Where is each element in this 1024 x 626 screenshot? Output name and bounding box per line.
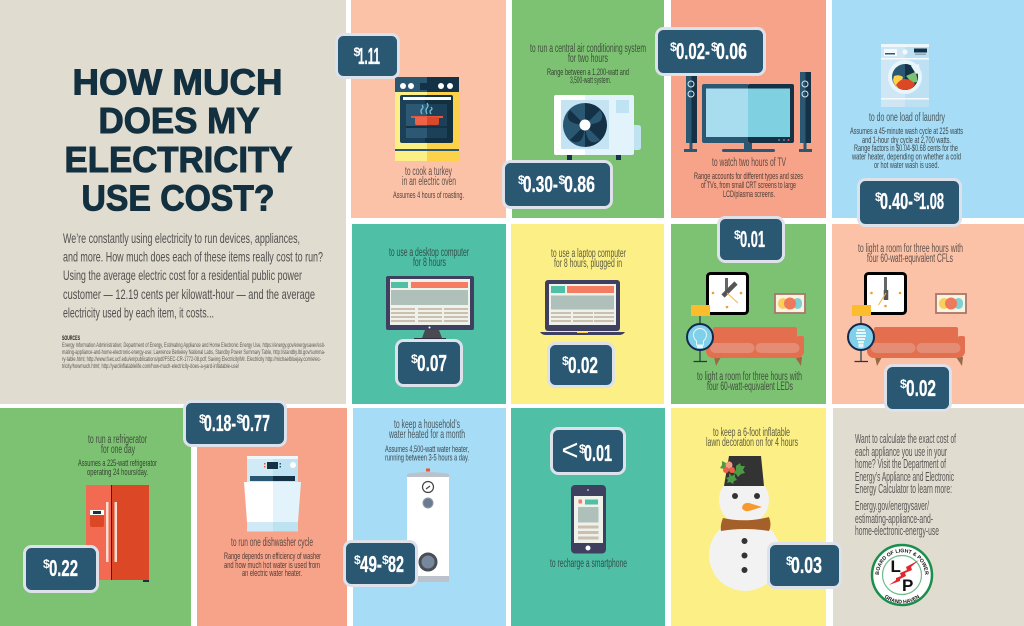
caption: refrigerator: for one day	[101, 444, 135, 456]
caption: laundry: to do one load of laundry	[869, 112, 945, 124]
panel: laptop computer	[511, 224, 664, 404]
price badge: refrigerator $0.22: 0.22	[49, 555, 78, 581]
caption: water heater: running between 3-5 hours a day.	[385, 452, 469, 464]
intro paragraph: customer — 12.19 cents per kilowatt-hour — and the average	[63, 286, 315, 302]
price badge: television $0.02-$0.06	[656, 28, 764, 74]
price badge: snowman $0.03	[768, 544, 840, 588]
price badge: smartphone less than $0.01	[552, 428, 624, 474]
logo: Board of Light and Power: GRAND HAVEN	[885, 594, 920, 604]
price badge: air conditioning $0.30-$0.86: $	[558, 173, 566, 187]
price badge: television $0.02-$0.06: $	[711, 40, 718, 54]
caption: television: to watch two hours of TV	[712, 157, 786, 169]
caption: air conditioning: for two hours	[568, 53, 608, 65]
panel: CFL lighting	[832, 224, 1024, 404]
price badge: air conditioning $0.30-$0.86: $	[518, 173, 525, 187]
price badge: oven $1.11: 1.11	[358, 43, 380, 69]
caption: dishwasher: Range depends on efficiency of washer	[224, 551, 321, 562]
icon: snowman	[709, 456, 781, 591]
price badge: desktop $0.07: $	[411, 352, 418, 366]
caption: LEDs	[697, 371, 802, 393]
caption: CFLs	[858, 243, 963, 265]
price badge: refrigerator $0.22	[24, 546, 98, 592]
text: calculator invitation: each appliance you use in your	[855, 445, 947, 459]
text: calculator invitation	[855, 432, 956, 496]
text: web address	[855, 499, 939, 538]
title: DOES MY	[98, 100, 260, 141]
price badge: television $0.02-$0.06: $	[670, 40, 677, 54]
price badge: dishwasher $0.18-$0.77	[184, 402, 286, 446]
price badge: air conditioning $0.30-$0.86: 0.30-	[523, 171, 558, 197]
icon: water heater	[407, 468, 449, 582]
panel: inflatable snowman	[671, 408, 826, 626]
caption: laundry: and 1-hour dry cycle at 2,700 watts.	[862, 135, 951, 146]
price badge: CFL lighting $0.02: $	[900, 377, 907, 391]
icon: sofa	[867, 327, 965, 366]
icon: dishwasher	[244, 456, 301, 532]
panel: laundry	[832, 0, 1024, 218]
title: HOW MUCH	[72, 62, 282, 102]
caption: turkey	[393, 166, 464, 201]
sources: Energy Information Administration; Department of Energy, Estimating Appliance and Home Electronic Energy Use, https://energy.gov/energysaver/esti-	[62, 342, 325, 349]
caption: turkey: to cook a turkey	[405, 166, 452, 178]
caption: desktop: to use a desktop computer	[389, 247, 469, 259]
caption: water heater: to keep a household’s	[394, 419, 460, 431]
price badge: CFL lighting $0.02: 0.02	[906, 375, 936, 401]
price badge: desktop $0.07: 0.07	[417, 350, 447, 376]
price badge: water heater $49-$82: 49-	[360, 551, 382, 577]
caption: dishwasher: to run one dishwasher cycle	[231, 537, 313, 549]
price badge: laptop $0.02: 0.02	[568, 352, 598, 378]
icon: smartphone	[571, 485, 606, 554]
caption: television	[694, 157, 803, 200]
price badge: water heater $49-$82: $	[382, 553, 389, 567]
intro paragraph: and more. How much does each of these items really cost to run?	[63, 248, 323, 264]
price badge: oven $1.11	[336, 34, 398, 78]
price badge: oven $1.11: $	[354, 45, 360, 59]
price badge: laundry $0.40-$1.08	[858, 180, 960, 226]
icon: washing machine	[881, 44, 929, 107]
panel: oven	[351, 0, 506, 218]
caption: television: LCD/plasma screens.	[723, 189, 775, 200]
intro paragraph: Using the average electric cost for a residential public power	[63, 267, 302, 283]
logo: Board of Light and Power: BOARD OF LIGHT & POWER	[875, 548, 928, 575]
panel: LED lighting	[671, 224, 826, 404]
caption: snowman: lawn decoration on for 4 hours	[706, 437, 798, 449]
sources: ry-table.html; http://www.fsec.ucf.edu/en/publications/pdf/FSEC-CR-1772-08.pdf; Saving Electricity/Mr. Electricity http://michaelbluejay.com/elec-	[62, 356, 321, 363]
price badge: television $0.02-$0.06: 0.06	[716, 38, 747, 64]
icon: laptop	[540, 280, 625, 335]
price badge: LED lighting $0.01: 0.01	[740, 226, 765, 252]
price badge: water heater $49-$82: $	[354, 553, 361, 567]
caption: refrigerator: to run a refrigerator	[88, 434, 147, 446]
caption: laundry	[850, 112, 963, 171]
price badge: smartphone less than $0.01: 0.01	[584, 440, 612, 466]
logo: Board of Light and Power	[870, 544, 934, 606]
caption: television: Range accounts for different types and sizes	[694, 171, 803, 182]
caption: smartphone: to recharge a smartphone	[550, 558, 627, 570]
price badge: snowman $0.03: $	[786, 554, 793, 568]
text: web address: home-electronic-energy-use	[855, 524, 939, 538]
panel: television	[671, 0, 826, 218]
sources	[62, 335, 325, 370]
text: web address: Energy.gov/energysaver/	[855, 499, 929, 513]
caption: CFLs: four 60-watt-equivalent CFLs	[867, 253, 953, 265]
sources: mating-appliance-and-home-electronic-energy-use; Lawrence Berkeley National Labs, Standby Power Summary Table, http://standby.lbl.gov/summa-	[62, 349, 325, 356]
icon: wall picture	[775, 294, 805, 313]
price badge: laundry $0.40-$1.08: 1.08	[919, 188, 944, 214]
price badge: television $0.02-$0.06: 0.02-	[676, 38, 710, 64]
icon: lamp with LED bulb	[687, 305, 713, 362]
price badge: air conditioning $0.30-$0.86: 0.86	[564, 171, 595, 197]
icon: clock	[708, 274, 748, 314]
price badge: LED lighting $0.01	[718, 218, 784, 262]
panel: water heater	[353, 408, 506, 626]
price badge: dishwasher $0.18-$0.77: $	[199, 412, 206, 426]
caption: snowman	[706, 427, 798, 449]
icon: television and speakers	[684, 72, 812, 152]
price badge: laundry $0.40-$1.08: $	[875, 190, 882, 204]
caption: water heater: Assumes 4,500-watt water heater,	[385, 444, 469, 455]
caption: dishwasher: an electric water heater.	[242, 568, 302, 579]
caption: refrigerator: Assumes a 225-watt refrigerator	[78, 458, 157, 469]
price badge: dishwasher $0.18-$0.77: 0.77	[242, 410, 270, 436]
panel: desktop computer	[352, 224, 506, 404]
price badge: smartphone less than $0.01: $	[579, 442, 586, 456]
title	[64, 62, 292, 218]
icon: clock	[866, 274, 906, 314]
price badge: dishwasher $0.18-$0.77: $	[236, 412, 244, 426]
panel: dishwasher	[197, 408, 347, 626]
caption: air conditioning: 3,500-watt system.	[570, 75, 611, 86]
text: web address: estimating-appliance-and-	[855, 512, 933, 526]
caption: refrigerator	[78, 434, 157, 478]
panel: refrigerator	[0, 408, 191, 626]
caption: turkey: in an electric oven	[402, 176, 456, 188]
caption: LEDs: to light a room for three hours with	[697, 371, 802, 383]
intro paragraph: electricity used by each item, it costs...	[63, 304, 214, 320]
caption: snowman: to keep a 6-foot inflatable	[713, 427, 790, 439]
caption: turkey: Assumes 4 hours of roasting.	[393, 190, 464, 201]
price badge: snowman $0.03: 0.03	[791, 552, 822, 578]
sources: tricity/howmuch.html; http://yardinflatablelife.com/how-much-electricity-does-a-yard-inflatable-use/	[62, 363, 239, 370]
caption: television: of TVs, from small CRT screens to large	[701, 180, 796, 191]
caption: air conditioning	[530, 43, 646, 86]
price badge: laundry $0.40-$1.08: 0.40-	[880, 188, 913, 214]
price badge: desktop $0.07	[396, 340, 462, 386]
title: USE COST?	[82, 178, 274, 218]
sources: SOURCES	[62, 335, 80, 342]
icon: wall picture	[936, 294, 966, 313]
caption: laptop	[551, 248, 626, 270]
price badge: water heater $49-$82	[344, 542, 416, 586]
icon: air conditioner	[554, 95, 641, 160]
price badge: smartphone less than $0.01: <	[562, 434, 578, 467]
icon: refrigerator	[86, 485, 149, 582]
price badge: dishwasher $0.18-$0.77: 0.18-	[204, 410, 236, 436]
icon: lamp with CFL bulb	[848, 305, 874, 362]
intro paragraph	[63, 230, 323, 320]
caption: laundry: or hot water wash is used.	[874, 160, 939, 171]
price badge: refrigerator $0.22: $	[43, 557, 50, 571]
icon: oven	[395, 77, 459, 161]
caption: water heater: water heated for a month	[388, 429, 465, 441]
price badge: LED lighting $0.01: $	[734, 228, 741, 242]
price badge: laptop $0.02	[548, 344, 614, 386]
caption: water heater	[385, 419, 469, 464]
panel: introduction	[0, 0, 346, 404]
caption: desktop: for 8 hours	[413, 257, 446, 269]
panel: smartphone	[511, 408, 665, 626]
icon: desktop monitor	[386, 276, 474, 340]
caption: laptop: for 8 hours, plugged in	[554, 258, 622, 270]
intro paragraph: We’re constantly using electricity to run devices, appliances,	[63, 230, 300, 246]
caption: LEDs: four 60-watt-equivalent LEDs	[707, 381, 793, 393]
price badge: CFL lighting $0.02	[886, 366, 950, 410]
logo: Board of Light and Power: L	[890, 557, 901, 576]
caption: dishwasher: and how much hot water is used from	[224, 560, 320, 571]
price badge: laptop $0.02: $	[562, 354, 569, 368]
caption: laptop: to use a laptop computer	[551, 248, 626, 260]
caption: air conditioning: to run a central air conditioning system	[530, 43, 646, 55]
caption: air conditioning: Range between a 1,200-watt and	[547, 67, 629, 78]
caption: desktop	[389, 247, 469, 269]
caption: refrigerator: operating 24 hours/day.	[87, 467, 148, 478]
caption: dishwasher	[224, 537, 321, 579]
text: calculator invitation: home? Visit the Department of	[855, 457, 946, 471]
panel: air conditioning	[512, 0, 664, 218]
price badge: air conditioning $0.30-$0.86	[504, 162, 612, 208]
logo: Board of Light and Power: P	[902, 576, 913, 595]
icon: sofa	[706, 327, 804, 366]
panel: learn more	[833, 408, 1024, 626]
price badge: laundry $0.40-$1.08: $	[914, 190, 920, 204]
price badge: water heater $49-$82: 82	[388, 551, 404, 577]
title: ELECTRICITY	[64, 139, 292, 180]
